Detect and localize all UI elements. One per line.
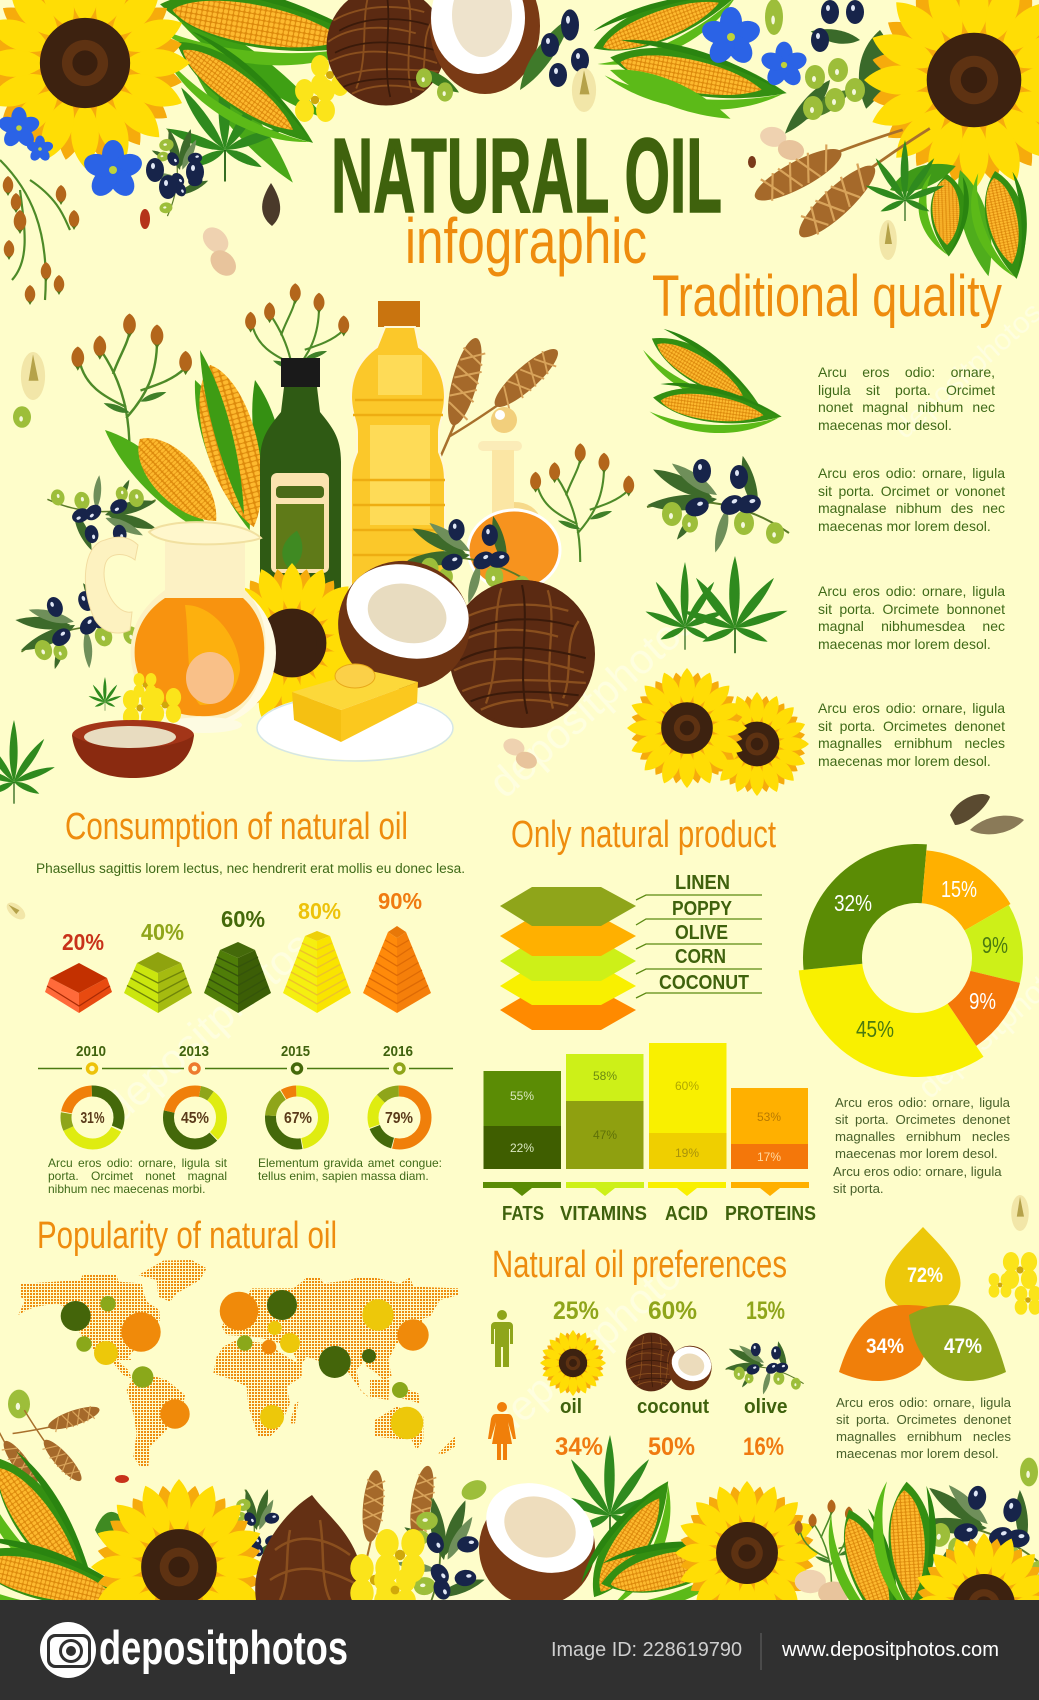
icon: corn: [637, 321, 784, 443]
preferences table: 16%: [743, 1433, 784, 1461]
layered hexagon chart: OLIVE: [675, 922, 728, 944]
icon: sunflowers: [621, 662, 814, 801]
text block: timeline left: nibhum nec maecenas morbi.: [48, 1182, 205, 1196]
footer bar: www.depositphotos.com: [781, 1638, 999, 1661]
text block: timeline left: porta. Orcimet nonet magnal: [48, 1169, 227, 1183]
donut: 45%: [168, 1091, 222, 1144]
pyramid chart: consumption percentages: 60%: [221, 906, 265, 932]
dotted world map with bubbles: [18, 1260, 458, 1467]
icon: woman: [488, 1402, 516, 1460]
preferences table: 15%: [746, 1297, 785, 1325]
text block: olive oil: magnalase nibhum des nec: [818, 500, 1005, 516]
donut chart: composition: 45%: [856, 1016, 894, 1042]
text block: composition: maecenas mor lorem desol.: [835, 1146, 998, 1161]
text block: corn oil: ligula sit porta. Orcimet: [818, 382, 995, 398]
preferences table: 25%: [553, 1297, 599, 1325]
donut charts by year: 79%: [385, 1110, 413, 1127]
preferences table: oil: [560, 1396, 582, 1418]
petal chart: 34%: [866, 1335, 904, 1358]
text block: olive oil: Arcu eros odio: ornare, ligula: [818, 465, 1005, 481]
layered hexagon chart: LINEN: [675, 872, 730, 894]
layered hexagon chart: COCONUT: [659, 972, 749, 994]
text block: timeline left: [48, 1156, 227, 1196]
icon: olive branch: [647, 454, 789, 554]
pyramid chart: consumption percentages: 90%: [378, 888, 422, 914]
heading: preferences: Natural oil preferences: [492, 1244, 787, 1286]
watermark: [95, 296, 1039, 1447]
stacked bar chart: ACID: [665, 1203, 708, 1225]
preferences table: 50%: [648, 1433, 695, 1461]
title: NATURAL OIL: [331, 117, 722, 235]
preferences table: 34%: [555, 1433, 603, 1461]
text block: composition: Arcu eros odio: ornare, ligula: [835, 1095, 1010, 1110]
heading: popularity: Popularity of natural oil: [37, 1215, 337, 1257]
text block: hemp oil: [818, 583, 1006, 652]
pyramid chart: consumption percentages: 80%: [298, 898, 341, 924]
text block: sunflower oil: [818, 700, 1006, 768]
bottom floral border: [0, 1402, 1039, 1685]
watermark: depositphotos: [480, 1237, 705, 1447]
pyramid chart: consumption percentages: 20%: [62, 929, 104, 955]
text block: timeline right: tellus enim, sapien massa diam.: [258, 1169, 429, 1183]
donut chart: composition: 9%: [969, 988, 996, 1014]
stacked bar chart: VITAMINS: [560, 1203, 647, 1225]
preferences table: 60%: [648, 1297, 697, 1325]
text block: petal chart: maecenas mor lorem desol.: [836, 1446, 999, 1461]
donut charts by year: 31%: [80, 1110, 104, 1127]
pyramid chart: consumption percentages: [45, 888, 431, 1013]
icon: seed pods: [950, 794, 1024, 834]
stacked bar chart: FATS: [502, 1203, 544, 1225]
text block: hemp oil: sit porta. Orcimete bonnonet: [818, 600, 1005, 616]
footer bar: [0, 1600, 1039, 1700]
donut chart: composition: 9%: [982, 932, 1008, 958]
donut: 31%: [66, 1091, 119, 1144]
donut charts by year: 45%: [181, 1110, 209, 1127]
text block: composition: [833, 1095, 1010, 1196]
text block: hemp oil: maecenas mor lorem desol.: [818, 636, 991, 652]
layered hexagon chart: POPPY: [672, 898, 733, 920]
stacked bar chart: 19%: [675, 1146, 699, 1160]
icon: man: [491, 1310, 513, 1367]
text block: hemp oil: magnal nibhumesdea nec: [818, 618, 1005, 634]
petal chart: 72%: [907, 1264, 943, 1287]
donut chart: composition: [799, 844, 1023, 1077]
text block: corn oil: [818, 364, 995, 432]
text block: petal chart: magnalles ernibhum necles: [836, 1429, 1011, 1444]
text block: composition: sit porta. Orcimetes denonet: [835, 1112, 1010, 1127]
stacked bar chart: PROTEINS: [725, 1203, 816, 1225]
petal chart: [839, 1227, 1006, 1381]
text block: petal chart: sit porta. Orcimetes denonet: [836, 1412, 1011, 1427]
watermark: depositphotos: [95, 922, 320, 1132]
layered hexagon chart: CORN: [675, 946, 726, 968]
donut: 67%: [270, 1091, 324, 1144]
text block: sunflower oil: Arcu eros odio: ornare, ligula: [818, 700, 1005, 716]
text block: composition: Arcu eros odio: ornare, ligula: [833, 1164, 1002, 1179]
donut chart: composition: 15%: [941, 876, 977, 902]
donut charts by year: [66, 1091, 426, 1144]
preferences table: coconut: [637, 1396, 709, 1418]
text block: composition: magnalles ernibhum necles: [835, 1129, 1010, 1144]
text block: hemp oil: Arcu eros odio: ornare, ligula: [818, 583, 1005, 599]
petal chart: 47%: [944, 1335, 982, 1358]
timeline: 2010: [76, 1043, 106, 1060]
heading: only natural product: Only natural product: [511, 814, 776, 856]
timeline: 2013: [179, 1043, 209, 1060]
text block: olive oil: sit porta. Orcimet or vononet: [818, 482, 1005, 498]
text block: olive oil: [818, 465, 1006, 534]
donut charts by year: 67%: [284, 1110, 312, 1127]
stacked bar chart: 53%: [757, 1110, 781, 1124]
stacked bar chart: [483, 1043, 816, 1225]
timeline: 2015: [281, 1043, 310, 1060]
preferences table: [488, 1297, 804, 1461]
pyramid chart: consumption percentages: 40%: [141, 919, 184, 945]
hero illustration: oils: [0, 283, 634, 804]
text block: timeline left: Arcu eros odio: ornare, ligula sit: [48, 1156, 227, 1170]
stacked bar chart: 55%: [510, 1089, 534, 1103]
stacked bar chart: 47%: [593, 1128, 617, 1142]
watermark: depositphotos: [480, 597, 705, 807]
text block: timeline right: Elementum gravida amet congue:: [258, 1156, 442, 1170]
text block: petal chart: Arcu eros odio: ornare, ligula: [836, 1395, 1011, 1410]
text block: sunflower oil: sit porta. Orcimetes denonet: [818, 718, 1005, 734]
footer bar: depositphotos: [99, 1621, 348, 1674]
subtitle: infographic: [405, 205, 647, 277]
text block: corn oil: Arcu eros odio: ornare,: [818, 364, 995, 380]
text block: olive oil: maecenas mor lorem desol.: [818, 518, 991, 534]
text block: corn oil: maecenas mor desol.: [818, 416, 952, 432]
layered hexagon chart: [500, 872, 762, 1030]
donut: 79%: [373, 1091, 426, 1144]
icon: hemp leaves: [644, 556, 789, 653]
timeline: 2016: [383, 1043, 413, 1060]
timeline: [38, 1043, 453, 1073]
top floral border: [0, 0, 1039, 305]
text block: corn oil: nonet magnal nibhum nec: [818, 399, 995, 415]
heading: consumption: Consumption of natural oil: [65, 806, 408, 848]
text block: sunflower oil: maecenas mor lorem desol.: [818, 752, 991, 768]
text block: sunflower oil: magnalles ernibhum necles: [818, 735, 1005, 751]
text block: composition: sit porta.: [833, 1181, 884, 1196]
stacked bar chart: 22%: [510, 1141, 534, 1155]
footer bar: Image ID: 228619790: [551, 1638, 742, 1661]
text block: petal chart: [836, 1395, 1011, 1461]
stacked bar chart: 58%: [593, 1069, 617, 1083]
preferences table: olive: [744, 1396, 788, 1418]
stacked bar chart: 17%: [757, 1150, 781, 1164]
text block: timeline right: [258, 1156, 442, 1183]
footer logo: [40, 1622, 96, 1678]
stacked bar chart: 60%: [675, 1079, 699, 1093]
subheading sentence: Phasellus sagittis lorem lectus, nec hendrerit erat mollis eu donec lesa.: [36, 861, 465, 876]
donut chart: composition: 32%: [834, 890, 872, 916]
